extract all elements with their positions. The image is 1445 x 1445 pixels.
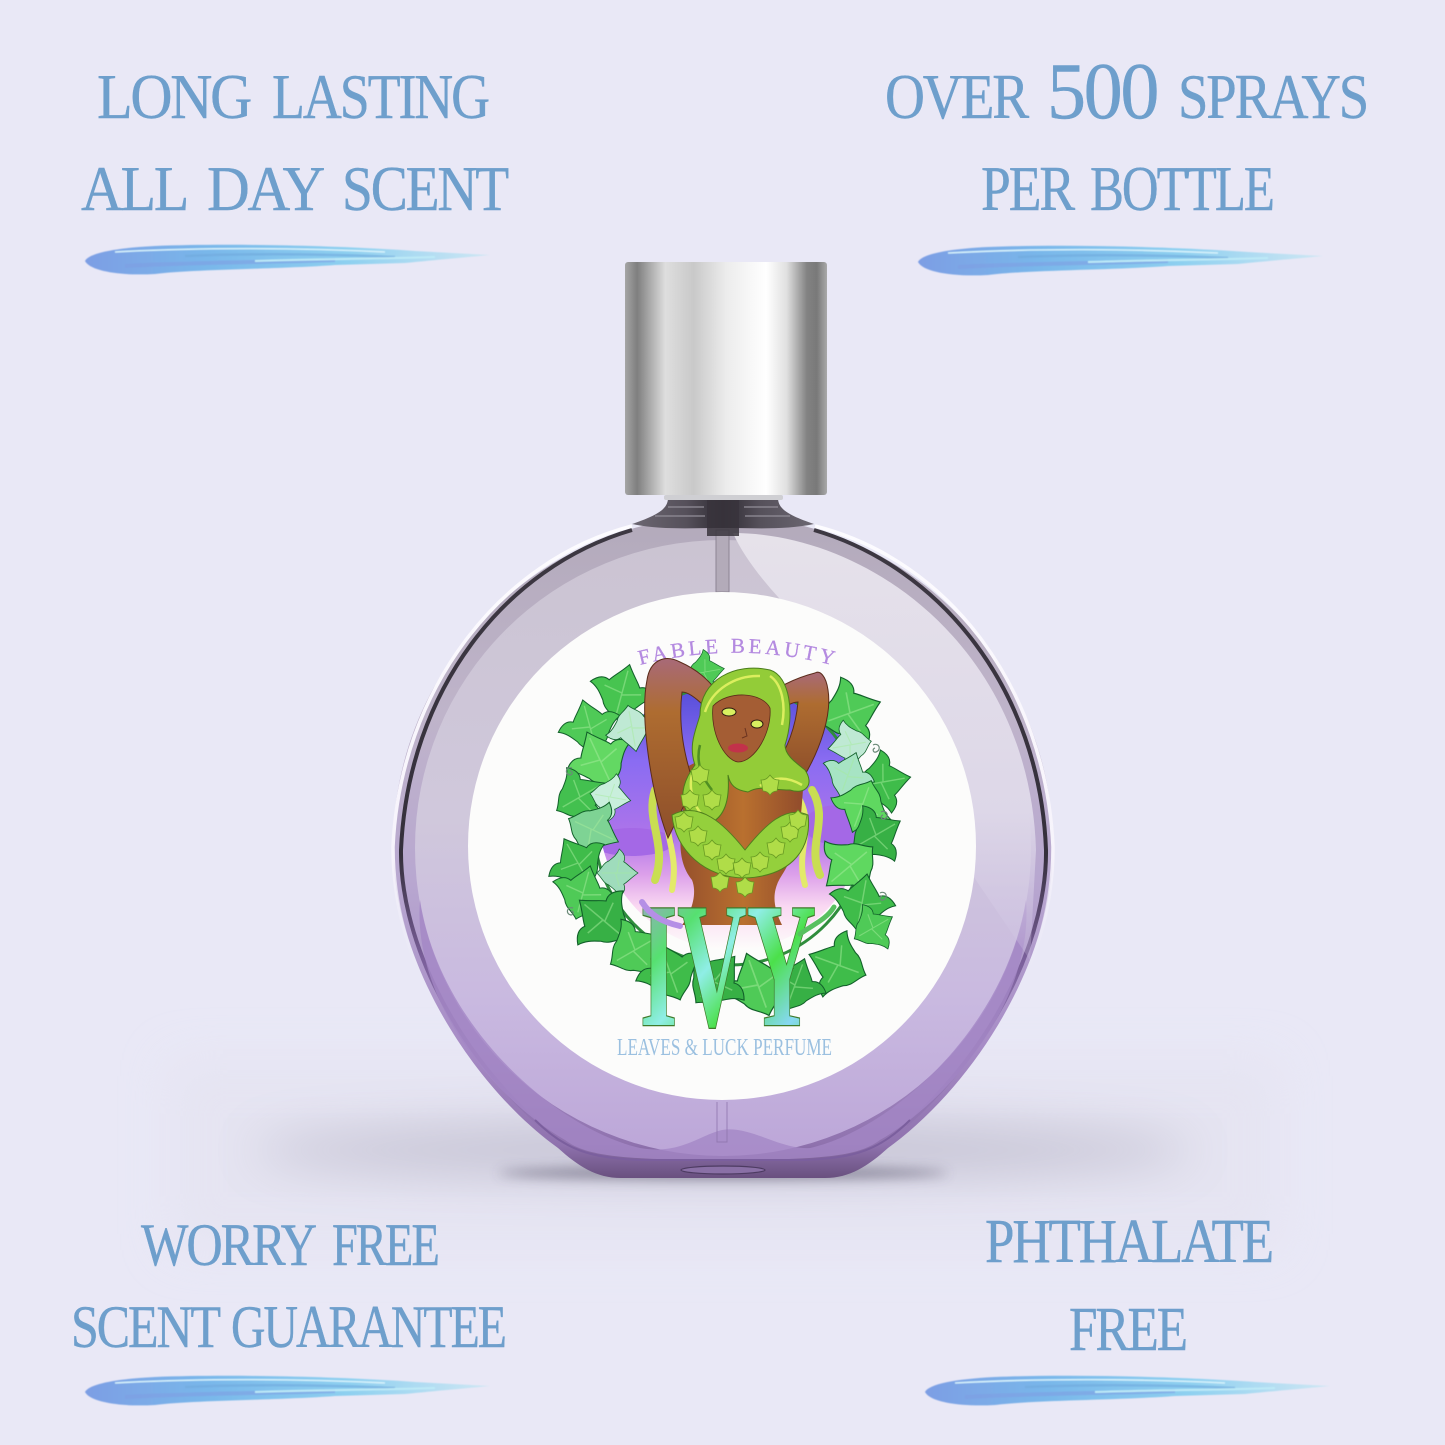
glass highlight xyxy=(733,533,1036,960)
hair strands xyxy=(691,676,802,818)
leaf details xyxy=(675,765,807,897)
heading: phthalate free xyxy=(985,1208,1272,1364)
left arm xyxy=(645,659,716,838)
face xyxy=(713,695,770,762)
heading: worry free scent guarantee: FREE xyxy=(332,1212,438,1278)
heading: long lasting all day scent: ALL xyxy=(81,153,187,224)
clouds xyxy=(602,806,855,856)
base foot xyxy=(681,1166,765,1174)
bottle neck xyxy=(632,498,814,528)
heading: over 500 sprays per bottle: OVER xyxy=(885,61,1029,132)
brand name on arc: FABLE BEAUTY xyxy=(637,638,836,665)
heading: long lasting all day scent: DAY xyxy=(207,153,324,224)
heading: long lasting all day scent xyxy=(81,61,509,224)
heading: worry free scent guarantee xyxy=(71,1212,505,1360)
brush stroke 4 xyxy=(925,1376,1330,1405)
torso xyxy=(680,751,806,925)
heading: worry free scent guarantee: WORRY xyxy=(141,1212,316,1278)
heading: phthalate free: FREE xyxy=(1069,1296,1186,1364)
back hair strands xyxy=(652,790,820,890)
leaf top xyxy=(672,810,809,878)
brush stroke 2 xyxy=(918,246,1323,275)
product name: LEAVES & LUCK PERFUME xyxy=(617,1035,832,1061)
round label xyxy=(468,592,976,1100)
brush stroke 3 xyxy=(85,1376,490,1405)
sky backdrop xyxy=(599,680,865,950)
spray tube upper xyxy=(716,530,729,592)
heading: worry free scent guarantee: SCENT xyxy=(71,1294,221,1360)
spray tube lower xyxy=(717,1102,727,1142)
brush stroke 1 xyxy=(85,245,490,274)
heading: long lasting all day scent: LONG xyxy=(97,61,251,132)
hair xyxy=(683,668,809,825)
cap xyxy=(625,262,827,495)
contact shadow xyxy=(498,1167,948,1179)
heading: long lasting all day scent: SCENT xyxy=(342,153,509,224)
lower liquid band xyxy=(419,900,1027,1160)
ivy vine ring xyxy=(594,685,866,965)
label artwork xyxy=(548,638,912,1064)
heading: over 500 sprays per bottle: 500 xyxy=(1047,48,1157,136)
heading: phthalate free: PHTHALATE xyxy=(985,1208,1272,1276)
soft bottle shadow xyxy=(253,1122,1193,1178)
perfume bottle xyxy=(393,262,1053,1178)
character illustration xyxy=(645,659,829,925)
base line xyxy=(535,1120,910,1160)
dark rim right xyxy=(814,530,1046,1125)
heading: over 500 sprays per bottle: PER xyxy=(981,153,1075,224)
inner glass band xyxy=(415,540,1031,1156)
neck bands xyxy=(655,507,790,516)
heading: worry free scent guarantee: GUARANTEE xyxy=(231,1294,505,1360)
heading: long lasting all day scent: LASTING xyxy=(272,61,489,132)
neck ring xyxy=(664,495,783,500)
right arm xyxy=(762,672,829,778)
white edge highlight xyxy=(393,526,1053,965)
tube collar xyxy=(707,496,739,536)
tendrils xyxy=(566,744,887,915)
heading: over 500 sprays per bottle: SPRAYS xyxy=(1178,61,1367,132)
ivy leaves xyxy=(536,647,916,1029)
heading: over 500 sprays per bottle xyxy=(885,48,1367,224)
dark rim xyxy=(401,530,632,1125)
floor glow xyxy=(170,1060,1280,1250)
heading: over 500 sprays per bottle: BOTTLE xyxy=(1090,153,1273,224)
facial features xyxy=(722,708,763,752)
IVY title: IVY xyxy=(640,866,816,1064)
letter swashes xyxy=(642,902,834,934)
glass body xyxy=(393,516,1053,1178)
